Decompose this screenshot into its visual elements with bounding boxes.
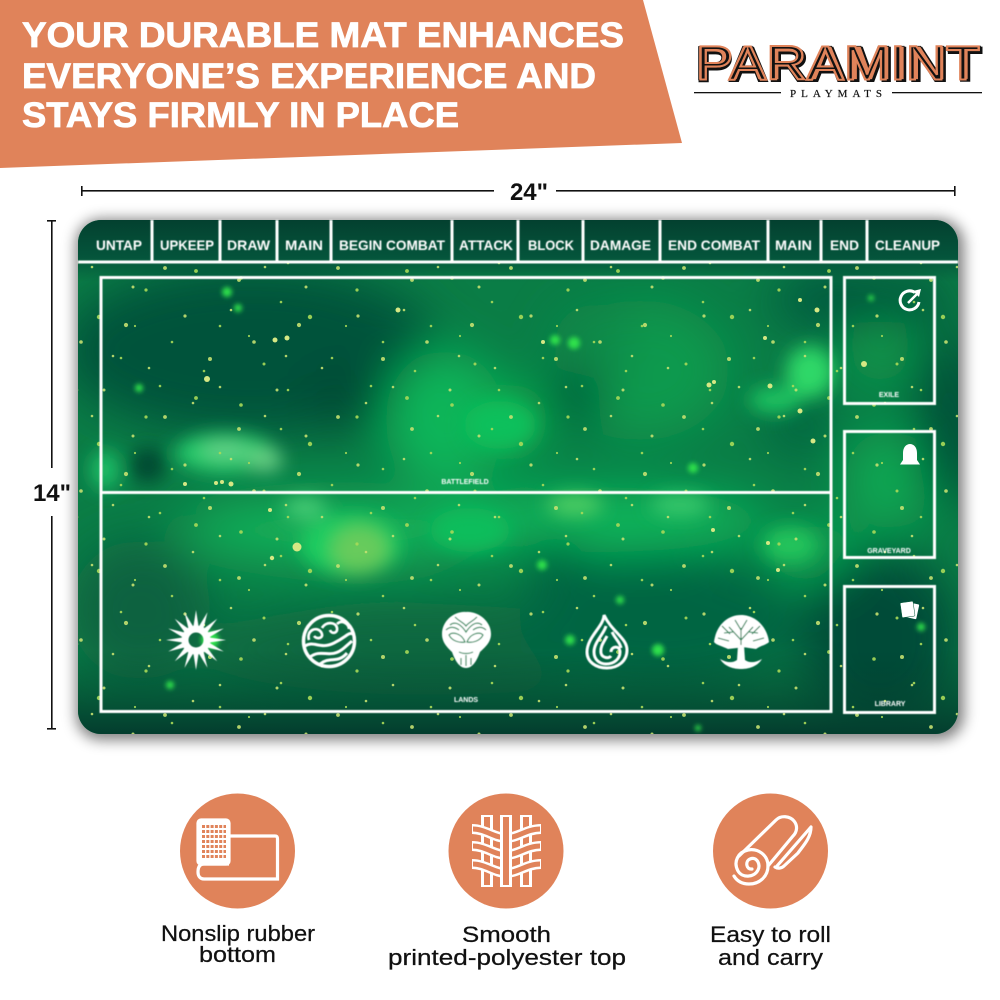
circle badge [448,794,564,908]
icon: fire [587,615,627,668]
label: Smooth [462,922,551,947]
zone labels: LIBRARY [875,701,906,708]
circle badge [713,794,828,908]
phase labels: UNTAP [96,237,142,253]
playmat shadow [76,219,964,740]
phase labels: END COMBAT [668,237,760,253]
label: and carry [718,945,823,970]
label [388,922,626,970]
label: Easy to roll [710,922,831,947]
icon: library cards [900,601,919,619]
icon: woven fabric [472,815,541,887]
label [161,921,315,967]
playmat [60,220,985,734]
phase labels: CLEANUP [875,237,940,253]
icon: graveyard tombstone [900,444,920,464]
feature: nonslip rubber bottom [161,794,315,967]
icon: exile rotate arrow [900,289,921,310]
phase labels: BEGIN COMBAT [339,237,445,253]
logo: Paramint Playmats: PARAMINT [695,38,981,90]
phase labels [96,237,940,253]
icon: water [304,616,354,666]
banner: headline: EVERYONE’S EXPERIENCE AND [22,57,596,96]
feature: smooth printed-polyester top [388,794,626,970]
label: Nonslip rubber [161,921,315,946]
icon: rolled mat [734,817,811,884]
phase labels: ATTACK [459,237,513,253]
hand-placed bright stars [183,298,867,572]
zone labels: GRAVEYARD [867,548,911,555]
label: printed-polyester top [388,945,626,970]
height dimension: 14 inches: 14" [33,480,71,507]
phase labels: MAIN [285,237,323,253]
mat line work [78,220,958,712]
phase labels: END [830,237,859,253]
phase labels: DRAW [227,237,271,253]
label: bottom [199,942,276,967]
logo: Paramint Playmats: PARAMINT [696,39,982,92]
logo: Paramint Playmats: PARAMINT [696,38,980,90]
banner: headline: STAYS FIRMLY IN PLACE [22,96,459,135]
zone labels: LANDS [454,697,478,704]
banner: headline [0,0,682,168]
feature: easy to roll and carry [710,794,831,970]
icon: sun [166,610,226,670]
zone labels: BATTLEFIELD [441,479,489,486]
icon: rubber mat corner [198,820,278,879]
logo: Paramint Playmats: PLAYMATS [790,88,882,100]
banner: headline: YOUR DURABLE MAT ENHANCES [22,16,624,55]
zone labels [441,392,911,708]
icon: skull [442,612,491,668]
circle badge [180,794,295,908]
phase labels: UPKEEP [160,237,214,253]
label [710,922,831,970]
phase labels: BLOCK [528,237,574,253]
phase labels: DAMAGE [590,237,651,253]
galaxy background [60,220,985,734]
width dimension: 24 inches: 24" [510,179,548,206]
phase labels: MAIN [775,237,812,253]
zone labels: EXILE [879,392,899,399]
icon: tree [714,615,769,669]
